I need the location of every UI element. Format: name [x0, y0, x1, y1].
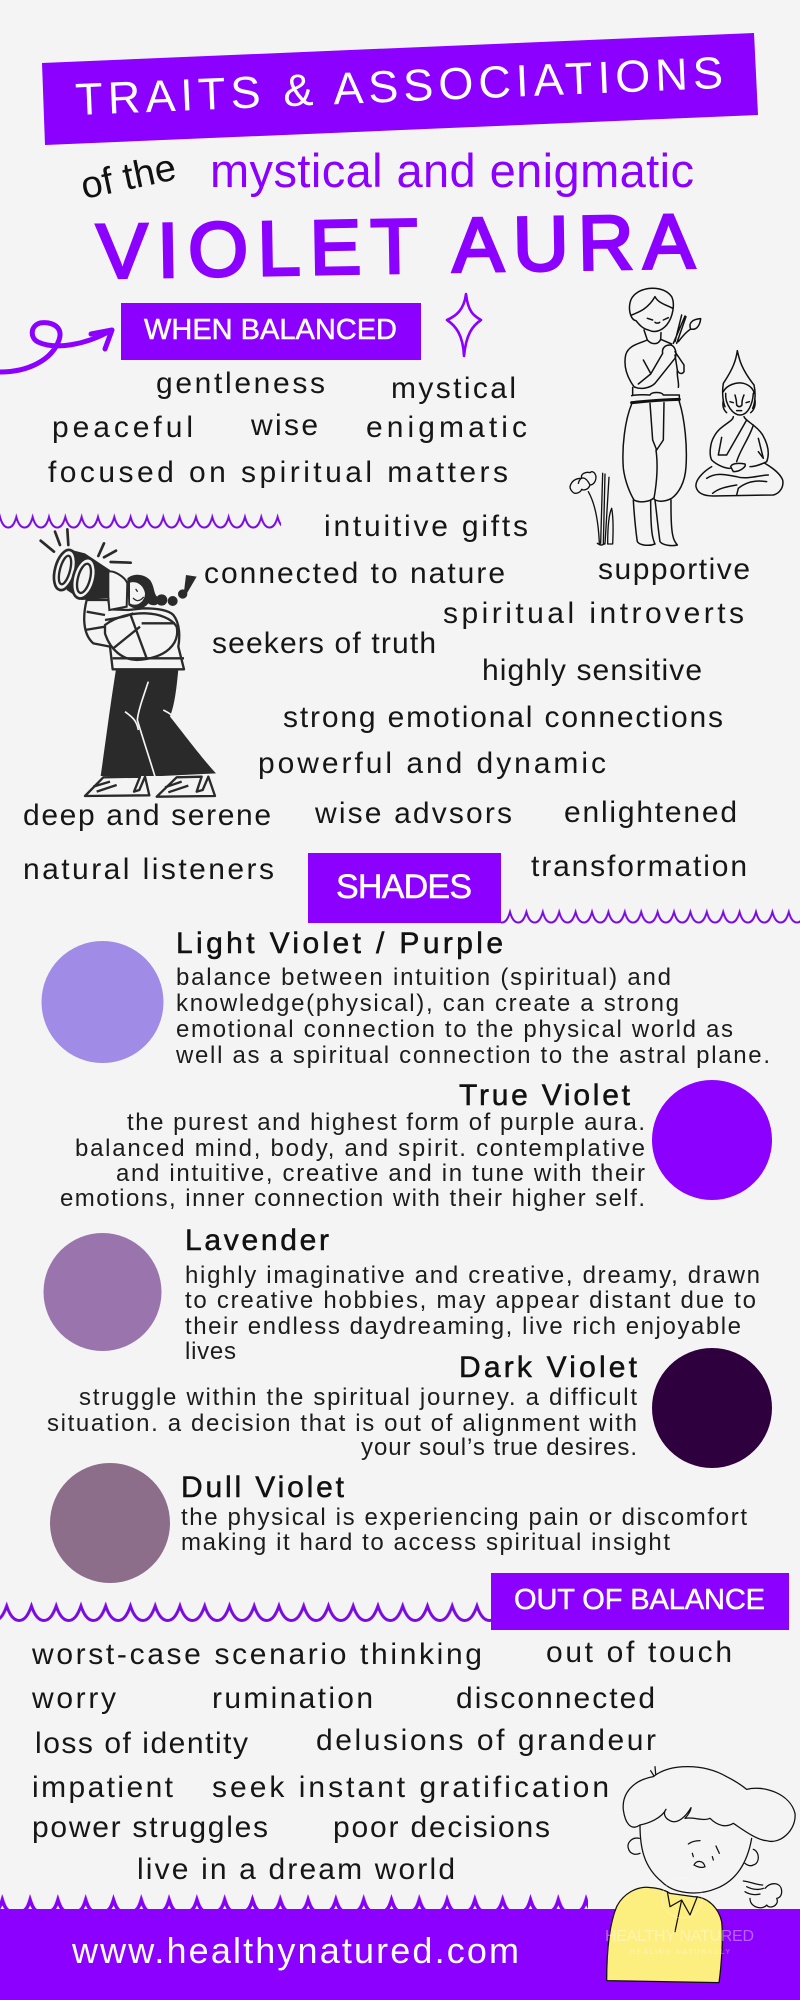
trouser highlights: [125, 682, 178, 777]
watermark logo: [605, 1878, 754, 1956]
description: emotions, inner connection with their higher self.: [60, 1185, 645, 1212]
title banner: [42, 33, 758, 145]
trait: rumination: [212, 1682, 373, 1715]
sigh puff: [743, 1881, 782, 1908]
illustration: boy, buddha and lotus: [570, 288, 783, 546]
trait: disconnected: [456, 1682, 655, 1715]
trait: seek instant gratification: [212, 1771, 609, 1804]
footer website: www.healthynatured.com: [71, 1930, 519, 1971]
shade: light violet: [42, 927, 770, 1069]
swatch: [652, 1348, 772, 1468]
hand: [108, 571, 127, 610]
swatch: [44, 1233, 162, 1351]
trait: power struggles: [32, 1811, 268, 1844]
trait: spiritual introverts: [443, 597, 744, 630]
swatch: [50, 1463, 170, 1583]
shade name: Lavender: [185, 1224, 329, 1257]
trait: connected to nature: [204, 557, 505, 590]
seated buddha: [696, 351, 783, 496]
trait: mystical: [391, 372, 516, 405]
trait: enlightened: [564, 796, 737, 829]
trait: seekers of truth: [212, 627, 436, 660]
description: and intuitive, creative and in tune with their: [116, 1160, 645, 1187]
description: the purest and highest form of purple aura.: [127, 1109, 645, 1136]
trait: gentleness: [156, 367, 325, 400]
shade: true violet: [60, 1079, 772, 1212]
description: balanced mind, body, and spirit. contemplative: [75, 1135, 645, 1162]
balanced traits group one: [48, 367, 527, 489]
head and hair: [640, 1825, 752, 1893]
trait: strong emotional connections: [283, 701, 723, 734]
shirt: [607, 1887, 722, 1983]
when balanced label: WHEN BALANCED: [144, 314, 397, 346]
trait: powerful and dynamic: [258, 747, 606, 780]
watermark name: HEALTHY NATURED: [605, 1928, 754, 1945]
trait: supportive: [598, 553, 750, 586]
banner title text: TRAITS & ASSOCIATIONS: [74, 47, 724, 125]
shade name: Light Violet / Purple: [176, 927, 503, 960]
hair and braid: [127, 575, 197, 609]
subtitle: of the: of the: [77, 147, 180, 208]
heading: out of balance: [491, 1573, 789, 1630]
trait: loss of identity: [35, 1727, 248, 1760]
binoculars: [67, 550, 110, 600]
decorative wavy divider lower: [0, 1600, 491, 1628]
boy holding incense: [623, 288, 701, 546]
illustration: girl with binoculars: [41, 529, 216, 797]
description: emotional connection to the physical world as: [176, 1016, 733, 1043]
shade name: True Violet: [459, 1079, 631, 1112]
sad face: [688, 1841, 719, 1867]
description: their endless daydreaming, live rich enjoyable: [185, 1313, 741, 1340]
icon: curled arrow: [0, 323, 112, 372]
trousers: [101, 669, 216, 776]
trait: poor decisions: [333, 1811, 550, 1844]
shade: dull violet: [50, 1463, 747, 1583]
shade name: Dull Violet: [181, 1471, 345, 1504]
hair tuft: [651, 1767, 656, 1776]
balanced traits group two: [23, 510, 750, 886]
trait: worst-case scenario thinking: [31, 1638, 482, 1671]
description: to creative hobbies, may appear distant due to: [185, 1287, 756, 1314]
shade: lavender: [44, 1224, 760, 1365]
description: the physical is experiencing pain or discomfort: [181, 1504, 747, 1531]
trait: transformation: [531, 850, 747, 883]
out of balance label: OUT OF BALANCE: [514, 1584, 765, 1616]
lotus plant: [570, 472, 613, 545]
decorative wavy divider shades: [501, 907, 800, 927]
swatch: [652, 1080, 772, 1200]
trait: enigmatic: [366, 411, 527, 444]
description: balance between intuition (spiritual) and: [176, 964, 671, 991]
trait: deep and serene: [23, 799, 271, 832]
subtitle: mystical and enigmatic: mystical and enigmatic: [210, 144, 694, 197]
trait: delusions of grandeur: [316, 1724, 656, 1757]
face: [130, 582, 145, 605]
sweater: [84, 600, 184, 669]
description: lives: [185, 1338, 236, 1365]
trait: live in a dream world: [137, 1853, 455, 1886]
footer band: [0, 1909, 800, 2000]
trait: focused on spiritual matters: [48, 456, 508, 489]
trait: intuitive gifts: [324, 510, 528, 543]
shade: dark violet: [47, 1348, 772, 1468]
shades label: SHADES: [336, 868, 472, 906]
icon: four point star: [447, 294, 481, 356]
watermark tagline: HEALING NATURALLY: [630, 1949, 730, 1956]
trait: impatient: [32, 1771, 174, 1804]
description: your soul’s true desires.: [361, 1434, 637, 1461]
heading: shades: [308, 853, 501, 923]
heading: when balanced: [121, 303, 421, 360]
trait: wise: [250, 409, 318, 442]
out of balance traits: [31, 1636, 732, 1886]
rays: [41, 529, 131, 563]
description: well as a spiritual connection to the astral plane.: [175, 1042, 770, 1069]
trait: worry: [31, 1682, 116, 1715]
shoes: [85, 777, 215, 797]
trait: peaceful: [52, 411, 193, 444]
collar: [667, 1892, 697, 1932]
trait: highly sensitive: [482, 654, 702, 687]
shade name: Dark Violet: [459, 1351, 638, 1384]
description: highly imaginative and creative, dreamy, drawn: [185, 1262, 760, 1289]
ears: [628, 1838, 758, 1866]
description: situation. a decision that is out of alignment with: [47, 1410, 637, 1437]
trait: natural listeners: [23, 853, 274, 886]
main heading: violet aura: VIOLET AURA: [96, 199, 696, 295]
illustration: sad boy: [607, 1767, 795, 1983]
description: knowledge(physical), can create a strong: [176, 990, 679, 1017]
trait: wise advsors: [314, 797, 512, 830]
description: making it hard to access spiritual insight: [181, 1529, 670, 1556]
description: struggle within the spiritual journey. a difficult: [79, 1384, 637, 1411]
swatch: [42, 941, 164, 1063]
trait: out of touch: [546, 1636, 732, 1669]
decorative spiked wave above footer: [0, 1893, 588, 1913]
decorative wavy divider top: [0, 512, 281, 532]
